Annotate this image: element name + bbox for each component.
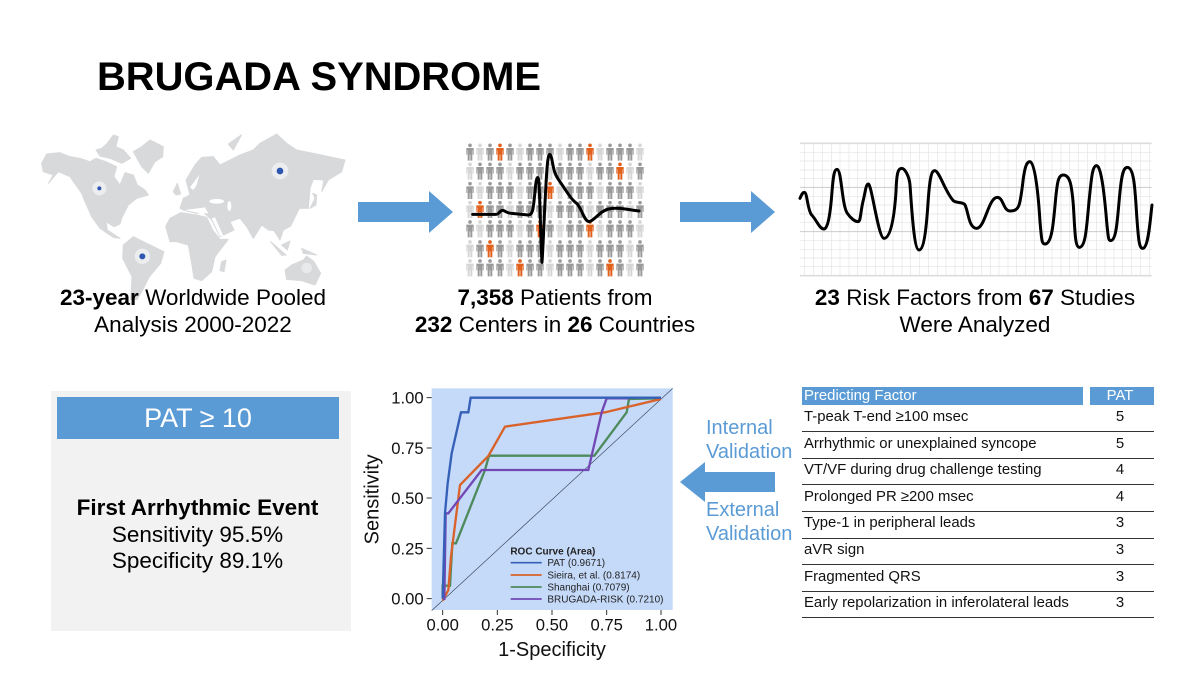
table rows: 3 xyxy=(1116,542,1124,558)
x axis labels xyxy=(426,616,677,635)
caption: patients and centers: 7,358 Patients from xyxy=(457,285,653,310)
performance text: Specificity 89.1% xyxy=(112,548,283,573)
marker: South America xyxy=(135,249,150,264)
label: internal validation xyxy=(706,417,792,463)
table rows: aVR sign xyxy=(804,542,864,558)
label: external validation: External xyxy=(706,499,779,521)
y axis labels: 1.00 xyxy=(391,389,424,408)
table rows: Type-1 in peripheral leads xyxy=(804,515,975,531)
panel: PAT threshold xyxy=(51,391,351,631)
PAT header bar: PAT ≥ 10 xyxy=(144,403,252,433)
marker: Asia xyxy=(272,163,288,179)
x axis labels: 0.75 xyxy=(590,616,623,635)
caption: worldwide analysis: 23-year Worldwide Pooled xyxy=(60,285,326,310)
caption: risk factors: 23 Risk Factors from 67 Studies xyxy=(815,285,1135,310)
label: external validation xyxy=(706,499,792,545)
y axis labels xyxy=(391,389,424,609)
curve: Shanghai xyxy=(443,398,661,599)
caption: patients and centers xyxy=(415,285,695,336)
ECG grid with arrhythmia trace xyxy=(798,142,1154,276)
table rows: Arrhythmic or unexplained syncope xyxy=(804,436,1037,452)
y axis labels: 0.50 xyxy=(391,489,424,508)
table rows: 4 xyxy=(1116,462,1124,478)
icon: people grid with ECG trace xyxy=(466,144,644,276)
table rows: 3 xyxy=(1116,515,1124,531)
caption: worldwide analysis xyxy=(60,285,326,336)
chart: ROC curves xyxy=(361,388,677,661)
plot background xyxy=(432,388,673,610)
legend xyxy=(510,547,663,605)
PAT header bar xyxy=(57,397,339,439)
arrow: map to patients xyxy=(358,191,453,233)
performance text: Sensitivity 95.5% xyxy=(112,522,283,546)
y axis labels: 0.25 xyxy=(391,539,424,558)
caption: risk factors: Were Analyzed xyxy=(900,312,1050,336)
arrow: validation to ROC xyxy=(680,462,775,502)
performance text xyxy=(77,495,318,573)
x axis labels: 1.00 xyxy=(645,616,677,635)
performance text: First Arrhythmic Event xyxy=(77,495,318,520)
label: internal validation: Validation xyxy=(706,441,792,463)
table rows: VT/VF during drug challenge testing xyxy=(804,462,1042,478)
title: BRUGADA SYNDROME xyxy=(97,55,541,99)
label: external validation: Validation xyxy=(706,523,792,545)
table rows: 5 xyxy=(1116,436,1124,452)
seas xyxy=(185,175,231,236)
x axis labels: 0.50 xyxy=(536,616,568,635)
curve: PAT xyxy=(443,398,661,599)
table rows: Fragmented QRS xyxy=(804,569,921,585)
marker: North America xyxy=(92,181,106,195)
table header: Predicting Factor xyxy=(804,388,917,404)
caption: patients and centers: 232 Centers in 26 Countries xyxy=(415,312,695,336)
icon: world map xyxy=(41,134,346,300)
table rows: 5 xyxy=(1116,409,1124,425)
table rows: 3 xyxy=(1116,595,1124,611)
label: internal validation: Internal xyxy=(706,417,773,439)
legend: ROC Curve (Area) xyxy=(510,547,595,558)
table rows: Early repolarization in inferolateral leads xyxy=(804,595,1069,611)
caption: worldwide analysis: Analysis 2000-2022 xyxy=(94,312,292,336)
legend: Sieira, et al. (0.8174) xyxy=(547,570,640,581)
legend: BRUGADA-RISK (0.7210) xyxy=(547,594,663,605)
legend: Shanghai (0.7079) xyxy=(547,582,630,593)
arrow: patients to risk factors xyxy=(680,191,775,233)
caption: risk factors xyxy=(815,285,1135,336)
table header: PAT xyxy=(1107,388,1133,404)
x axis labels: 0.00 xyxy=(426,616,459,635)
table rows: 3 xyxy=(1116,569,1124,585)
y axis labels: 0.00 xyxy=(391,590,424,609)
x axis title: 1-Specificity xyxy=(498,639,606,661)
table rows: Prolonged PR ≥200 msec xyxy=(804,489,974,505)
curve: Sieira xyxy=(443,399,661,601)
y axis title: Sensitivity xyxy=(361,454,383,544)
x axis labels: 0.25 xyxy=(481,616,514,635)
y axis labels: 0.75 xyxy=(391,439,424,458)
table rows xyxy=(802,409,1154,618)
legend: PAT (0.9671) xyxy=(547,558,605,569)
table header xyxy=(802,387,1154,405)
curve: BRUGADA-RISK xyxy=(444,398,629,600)
table rows: T-peak T-end ≥100 msec xyxy=(804,409,968,425)
table rows: 4 xyxy=(1116,489,1124,505)
